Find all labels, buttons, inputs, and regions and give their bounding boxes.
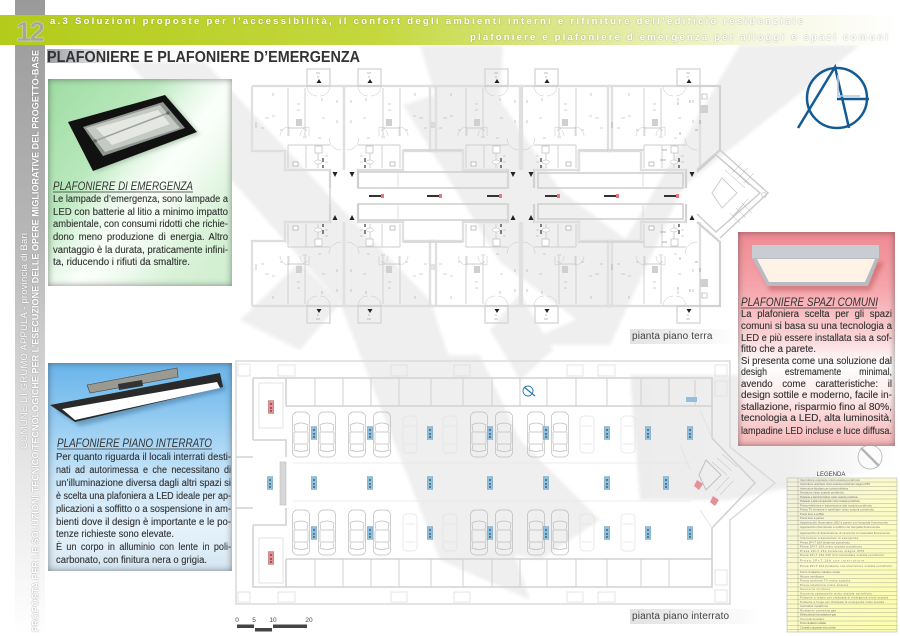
legend: Cronotermostato — [800, 617, 824, 621]
vertical text line 1: COMUNE DI GRUMO APPULA - provincia di Bari — [19, 233, 30, 449]
title: PLAFONIERE E PLAFONIERE D’EMERGENZA — [47, 49, 360, 66]
legend: Suoneria campanello misto scatola portafrutto — [800, 591, 872, 595]
text block: Si presenta come una soluzione dal — [741, 356, 892, 367]
legend: Suoneria citofono — [800, 587, 830, 591]
legend: Interruttore crepuscolare di emergenza — [800, 536, 858, 540]
legend: Apparecchio illuminante LED a parete con lampada fluorescente — [800, 520, 888, 524]
legend: Punto di allaccio caldaia — [800, 621, 826, 625]
label: pianta piano terra: pianta piano terra — [632, 331, 713, 342]
text block: vantaggio è la durata, praticamente infini- — [53, 245, 228, 256]
legend: Presa 2P+T 16A misto scatola portafrutto — [800, 545, 862, 549]
heading: PLAFONIERE DI EMERGENZA — [53, 181, 193, 193]
text block: stallazione, risparmio fino al 80%, — [741, 402, 892, 413]
legend: Interruttore unipolare misto scatola portafrutto — [800, 478, 860, 482]
scale bar: 10 — [269, 617, 277, 624]
icon: basement lamp — [50, 368, 227, 428]
header line 1: a.3 Soluzioni proposte per l’accessibilità, il confort degli ambienti interni e rifiniture dell’edificio residenziale — [50, 16, 803, 27]
stair core — [330, 150, 768, 238]
legend: Presa telefonica misto scatola — [800, 583, 848, 587]
basement parked cars — [292, 412, 635, 555]
text block: ambientale, con consumi ridotti che richie- — [53, 219, 228, 230]
text block — [741, 309, 893, 437]
text block: carbonato, con finitura nera o grigia. — [56, 555, 207, 566]
scale bar: 5 — [252, 617, 256, 624]
legend: Interruttore bipolare per cottura elettrica — [800, 486, 848, 490]
text block: dono meno produzione di energia. Altro — [53, 232, 228, 243]
text block: La plafoniera scelta per gli spazi — [741, 309, 892, 320]
text block — [56, 452, 231, 566]
icon: ceiling panel lamp — [752, 245, 884, 293]
ground floor plan upper wing — [252, 69, 720, 188]
legend: Apparecchio illuminante a soffitto con lampada fluorescente — [800, 525, 880, 529]
legend: Centralina rivelazione — [800, 604, 828, 608]
text block: ta, riducendo i rifiuti da smaltire. — [53, 257, 190, 268]
legend: Deviatore misto scatola portafrutto — [800, 491, 844, 495]
header line 2: plafoniere e plafoniere d’emergenza per alloggi e spazi comuni — [470, 32, 888, 43]
basement walls — [236, 361, 775, 604]
legend: Punto di allaccio caldaia murale — [800, 570, 840, 574]
scale bar: 0 — [235, 617, 239, 624]
legend: Presa telefonica e trasmissione dati scatola portafrutto — [800, 503, 872, 507]
text block: Per quanto riguarda il locali interrati desti- — [56, 452, 231, 463]
page number: 12 — [16, 16, 45, 47]
text block: LED con batterie al litio a minimo impatto — [53, 207, 228, 218]
text block: design sottile e moderno, facile in- — [741, 390, 892, 401]
emergency light markers — [369, 194, 679, 198]
legend: Centralino appartamento privato — [800, 625, 836, 629]
scale bar — [235, 617, 313, 632]
scale bar: 20 — [305, 617, 313, 624]
ground floor plan lower wing — [252, 204, 720, 323]
legend: Pulsante a tasti interruttore misto scatola portafrutto — [800, 495, 858, 499]
icon: north symbol — [858, 445, 882, 469]
legend: Punto luce a soffitto — [800, 512, 824, 516]
legend: Presa 2P+T 16A bivalente con interruttore scatola portafrutto — [800, 564, 892, 568]
text block: bienti dove il design è importante e le po- — [56, 517, 231, 528]
legend: Interruttore unipolare misto scatola portafrutto stagna IP55 — [800, 482, 870, 486]
legend: Punto luce a parete — [800, 516, 824, 520]
text block: tecnologia a LED, alta luminosità, — [741, 413, 892, 424]
panel: plafoniere spazi comuni — [738, 232, 895, 446]
icon: north arrow in basement — [523, 386, 535, 396]
panel: plafoniere piano interrato — [48, 363, 232, 571]
legend: Rivelatore presenza gas — [800, 608, 837, 612]
text block: tenze richieste sono elevate. — [56, 529, 174, 540]
text block: LED e più essere installata sia a sof- — [741, 333, 892, 344]
legend: Presa TV terrestre e satellitare misto scatola portafrutto — [800, 508, 874, 512]
panel: plafoniere di emergenza — [48, 79, 232, 286]
text block: Le lampade d’emergenza, sono lampade a — [53, 194, 229, 205]
legend: Pulsante a fungo per chiamata di emergenza misto scatola — [800, 600, 884, 604]
text block: avendo come caratteristiche: il — [741, 379, 892, 390]
legend: Presa 2P+T 16A 230 Volt comandata scatola portafrutto — [800, 553, 884, 557]
title shadow — [47, 49, 117, 63]
legend: Presa 2P+T 16A con interruttore — [800, 558, 864, 562]
legend: Elettrovalvola intercettazione gas — [800, 613, 837, 617]
label: pianta piano terra — [630, 329, 735, 344]
text block: un’illuminazione diversa dagli altri spazi si — [56, 478, 231, 489]
legend: Apparecchio di illuminazione di sicurezza con lampada fluorescente — [800, 531, 890, 535]
legend: LEGENDA — [817, 472, 845, 478]
legend: Pulsante a tirante per chiamata di emergenza misto scatola — [800, 596, 888, 600]
text block: comuni si basa su una tecnologia a — [741, 321, 893, 332]
vertical text line 2: PROPOSTA PER LE SOLUZIONI TECNICO/TECNOLOGICHE PER L’ESECUZIONE DELLE OPERE MIGLIORATIVE DEL PROGETTO-BASE — [30, 50, 40, 632]
legend: Pulsante a tasti campanello misto scatola portafrutto — [800, 499, 860, 503]
legend: Motore ventilatore — [800, 574, 824, 578]
label: pianta piano interrato — [630, 609, 760, 624]
legend: Presa 2P+T 16A bivalente portafrutto — [800, 540, 850, 544]
legend: Presa antenna TV misto scatola — [800, 579, 850, 583]
logo — [798, 67, 869, 128]
text block — [53, 194, 229, 268]
text block: fitto che a parete. — [741, 344, 816, 355]
label: pianta piano interrato: pianta piano interrato — [632, 611, 729, 622]
legend: Presa 2P+T 16A bivalente stagna IP55 — [800, 549, 864, 553]
icon: emergency lamp — [68, 95, 200, 172]
heading: PLAFONIERE SPAZI COMUNI — [741, 297, 879, 309]
basement ceiling lights — [267, 397, 719, 564]
